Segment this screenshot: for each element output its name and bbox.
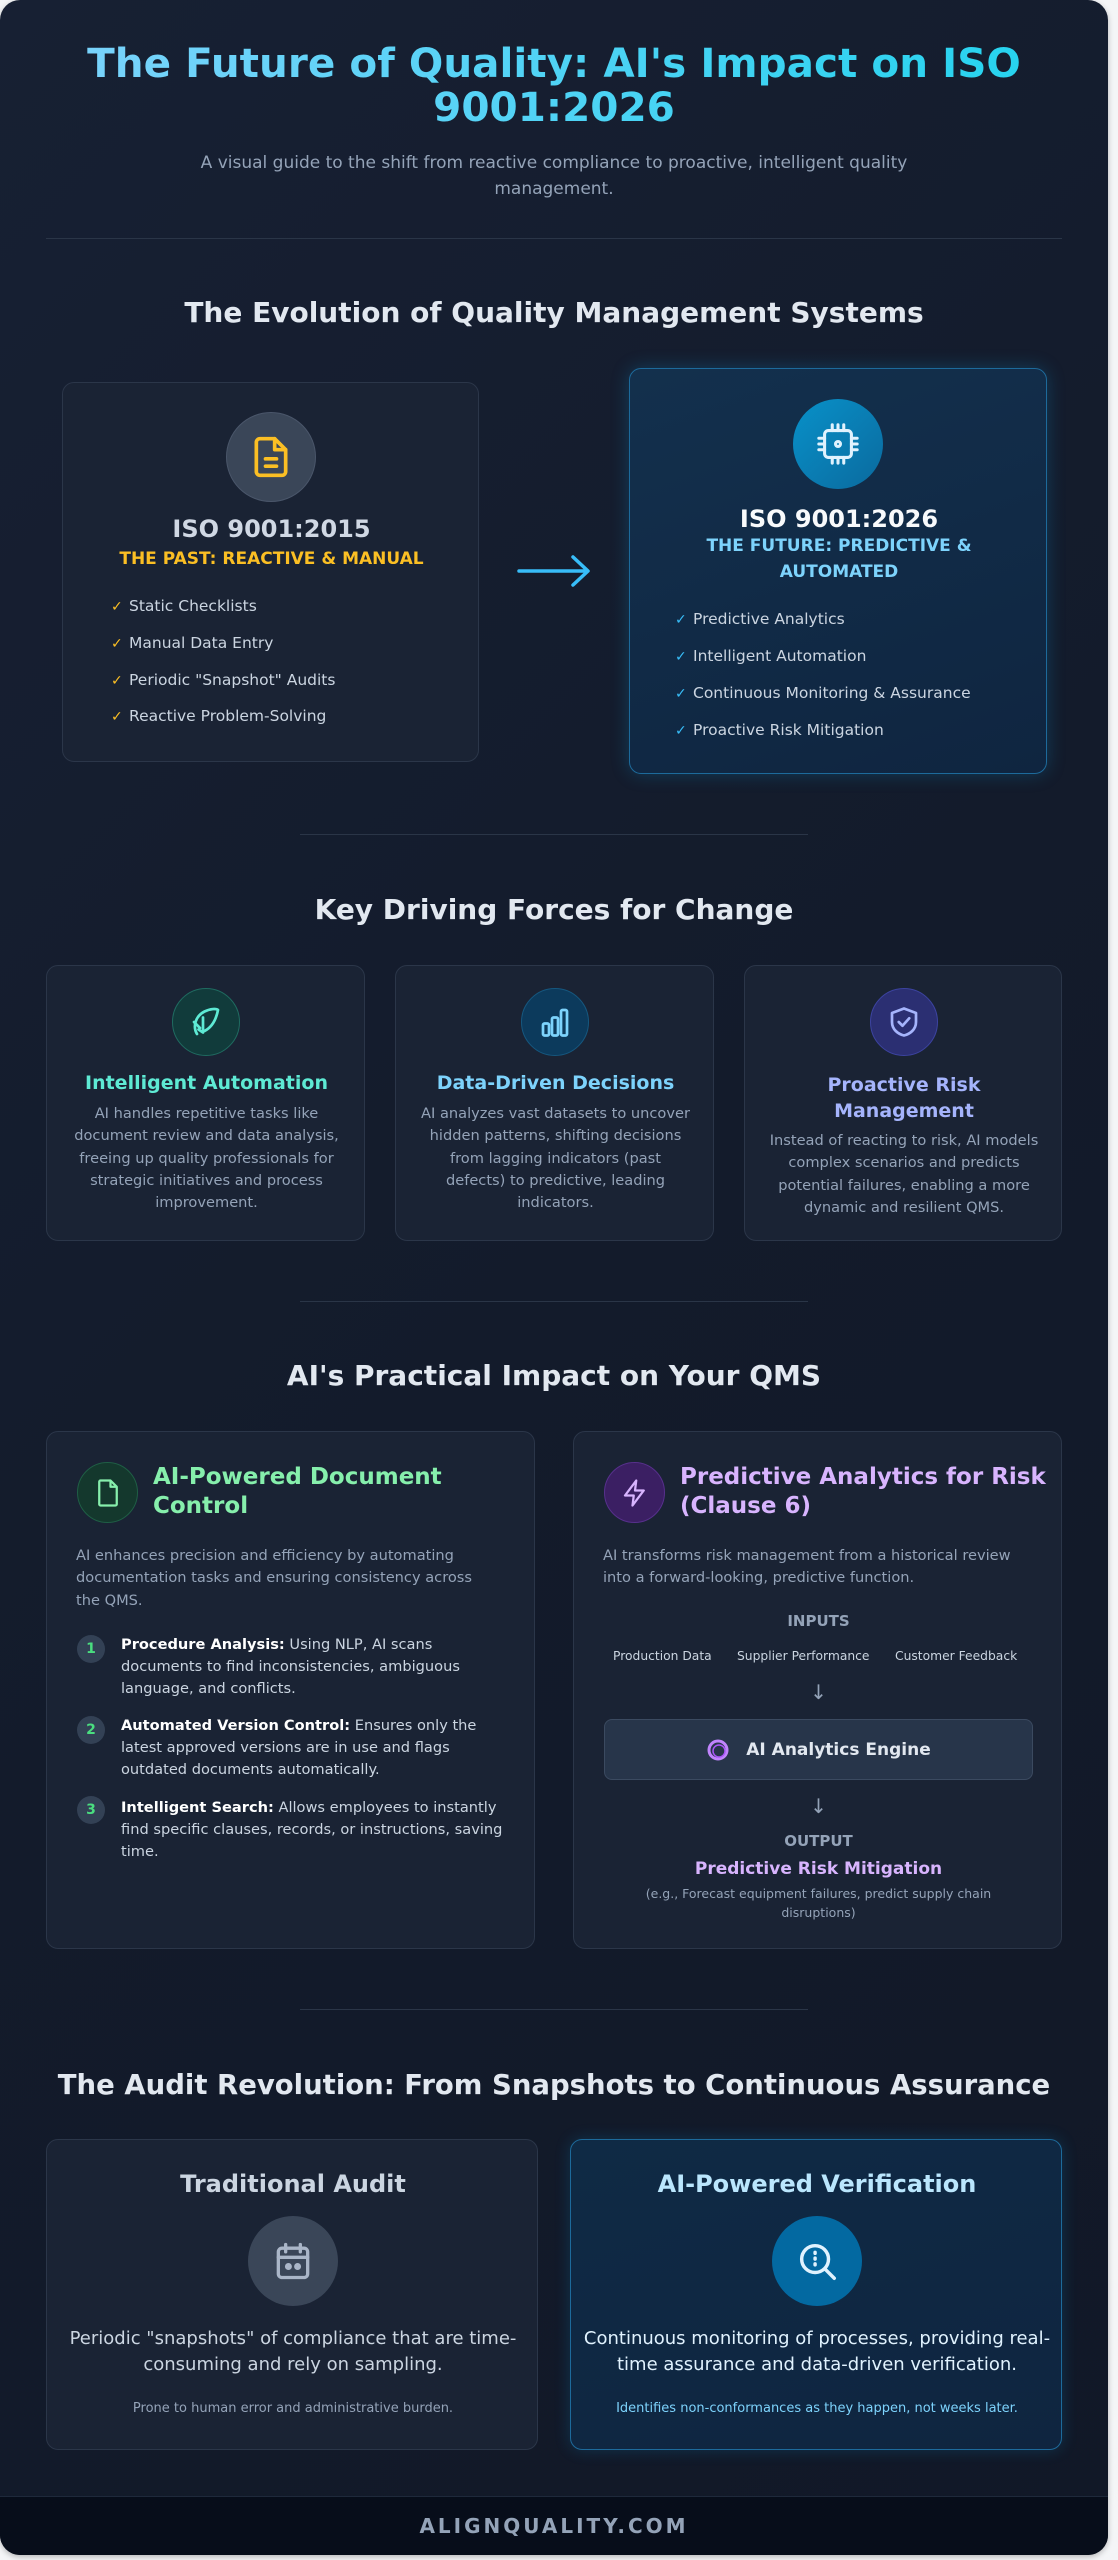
panel: ISO 9001:2015 past [62,382,479,762]
icon: chip [793,399,883,489]
subtitle: A visual guide to the shift from reactive compliance to proactive, intelligent quality management. [201,153,907,199]
heading: audit revolution: The Audit Revolution: From Snapshots to Continuous Assurance [58,2069,1050,2101]
panel: AI-powered verification [570,2139,1062,2450]
numbered list [77,1635,502,1860]
list: past features: ✓ [111,709,123,725]
flow diagram: Supplier Performance [737,1649,870,1663]
panel: document control: Intelligent Search: Allows employees to instantly find specific clauses, records, or instructions, saving time. [121,1799,502,1860]
title: document control: Control [153,1493,248,1519]
list: past features: ✓ [111,636,123,652]
title: proactive risk [827,1074,981,1122]
flow diagram: Production Data [613,1649,712,1663]
text: AI enhances precision and efficiency by automating documentation tasks and ensuring consistency across the QMS. [76,1547,472,1609]
subheading: past: THE PAST: REACTIVE & MANUAL [119,549,424,569]
heading: practical impact: AI's Practical Impact on Your QMS [287,1359,821,1392]
heading: evolution: The Evolution of Quality Management Systems [184,296,924,329]
panel: intelligent automation [46,965,365,1241]
icon: document [77,1462,138,1523]
list: future features: ✓ [675,723,687,739]
title: predictive analytics [680,1464,1046,1519]
panel: document control [46,1431,535,1949]
title: proactive risk: Management [834,1100,974,1122]
title: Traditional Audit [180,2170,406,2198]
text: Instead of reacting to risk, AI models complex scenarios and predicts potential failures, enabling a more dynamic and resilient QMS. [770,1132,1038,1216]
flow diagram: (e.g., Forecast equipment failures, predict supply chain disruptions) [646,1886,991,1920]
subheading: future: THE FUTURE: PREDICTIVE & [706,536,972,556]
list: future features: Proactive Risk Mitigation [693,721,884,739]
heading: ISO 9001:2015: ISO 9001:2015 [172,515,371,543]
list: future features: Continuous Monitoring & Assurance [693,684,971,702]
title: predictive analytics: Predictive Analytics for Risk [680,1464,1046,1490]
text: AI analyzes vast datasets to uncover hidden patterns, shifting decisions from lagging indicators (past defects) to predictive, leading indicators. [421,1105,690,1211]
flow diagram: Predictive Risk Mitigation [695,1859,942,1879]
icon: document [226,412,316,502]
title: predictive analytics: (Clause 6) [680,1493,811,1519]
text: AI transforms risk management from a historical review into a forward-looking, predictive function. [603,1547,1011,1586]
list: future features: Intelligent Automation [693,647,866,665]
icon: bar chart [521,988,589,1056]
footer [0,2496,1108,2555]
heading: ISO 9001:2026: ISO 9001:2026 [740,505,938,533]
panel: proactive risk [744,965,1062,1241]
numbered list: 2 [86,1722,96,1738]
title: intelligent automation: Intelligent Automation [85,1072,328,1094]
arrow [517,555,590,587]
list: future features: ✓ [675,649,687,665]
text: AI handles repetitive tasks like document review and data analysis, freeing up quality professionals for strategic initiatives and process improvement. [74,1105,339,1211]
list: past features [111,597,335,725]
flow diagram: ↓ [810,1680,827,1704]
panel: data-driven decisions [395,965,714,1241]
panel: predictive analytics [573,1431,1062,1949]
flow diagram: Customer Feedback [895,1649,1017,1663]
list: future features [675,610,971,739]
list: past features: Manual Data Entry [129,634,273,652]
text: Periodic "snapshots" of compliance that are time-consuming and rely on sampling. [70,2328,516,2375]
panel: traditional audit [46,2139,538,2450]
numbered list: 1 [86,1641,96,1657]
flow diagram: OUTPUT [784,1832,853,1850]
list: future features: ✓ [675,686,687,702]
icon: lightning [604,1462,665,1523]
list: future features: Predictive Analytics [693,610,845,628]
icon: search [772,2216,862,2306]
list: future features: ✓ [675,612,687,628]
icon: calendar [248,2216,338,2306]
numbered list: Automated Version Control: Ensures only the latest approved versions are in use and flags outdated documents automatically. [121,1717,476,1778]
numbered list: Procedure Analysis: Using NLP, AI scans documents to find inconsistencies, ambiguous language, and conflicts. [121,1636,460,1697]
subheading: future [706,536,972,582]
list: past features: Periodic "Snapshot" Audits [129,671,335,689]
footer: ALIGNQUALITY.COM [419,2514,689,2538]
list: past features: Static Checklists [129,597,257,615]
flow diagram: INPUTS [787,1612,850,1630]
title: The Future of Quality: AI's Impact on ISO 9001:2026 [87,39,1021,131]
flow diagram [604,1612,1033,1920]
text: Continuous monitoring of processes, providing real-time assurance and data-driven verification. [584,2328,1050,2375]
note: Prone to human error and administrative burden. [133,2401,453,2416]
subheading: future: AUTOMATED [780,562,898,582]
title: document control: AI-Powered Document [153,1464,442,1490]
list: past features: Reactive Problem-Solving [129,707,326,725]
title: AI-Powered Verification [658,2170,976,2198]
title: data-driven: Data-Driven Decisions [437,1072,674,1094]
numbered list: 3 [86,1802,96,1818]
icon: shield [870,988,938,1056]
flow diagram: ↓ [810,1794,827,1818]
title: proactive risk: Proactive Risk [827,1074,980,1096]
flow diagram: AI Analytics Engine [746,1740,931,1760]
list: past features: ✓ [111,599,123,615]
heading: driving forces: Key Driving Forces for Change [315,893,793,926]
note: Identifies non-conformances as they happen, not weeks later. [616,2401,1018,2416]
title: document control [153,1464,442,1519]
list: past features: ✓ [111,673,123,689]
icon: automation [172,988,240,1056]
panel: ISO 9001:2026 future [629,368,1047,774]
